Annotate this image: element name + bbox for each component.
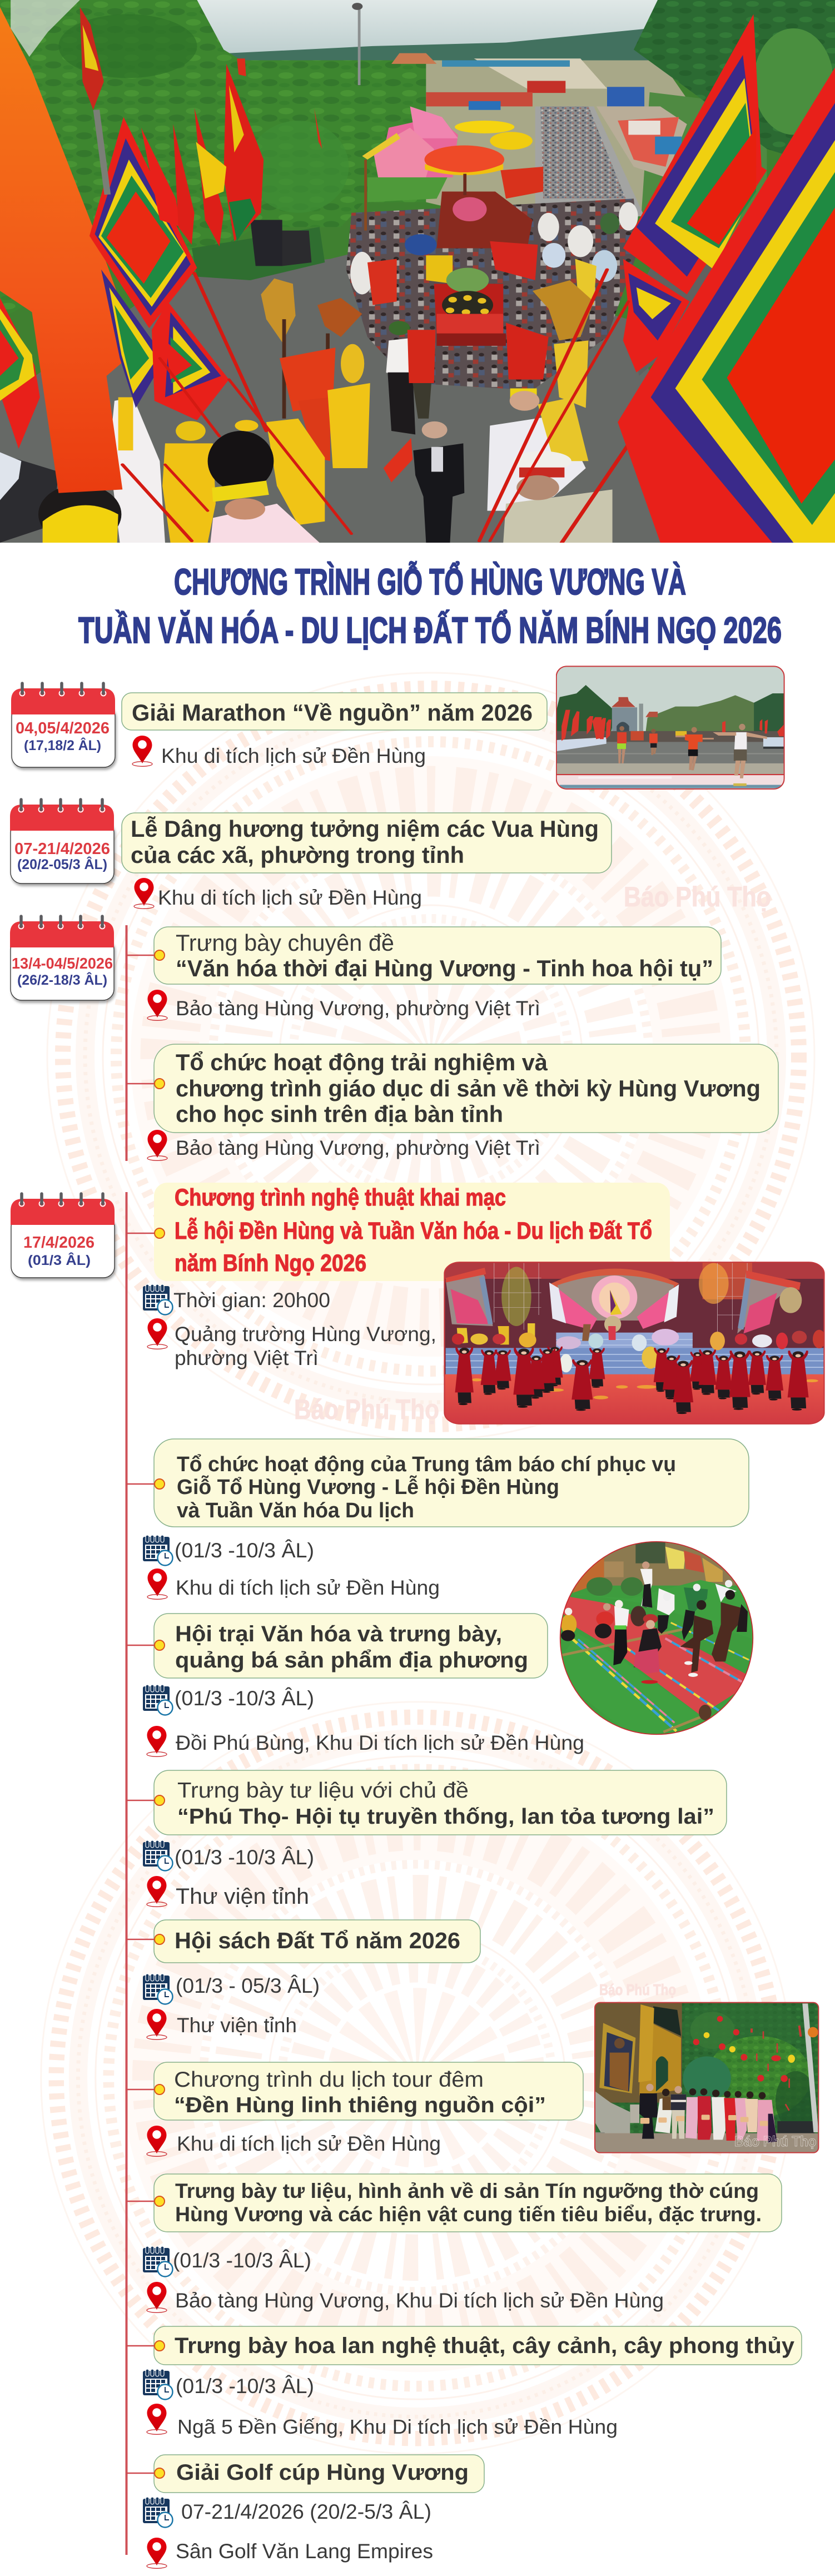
location: Ngã 5 Đền Giếng, Khu Di tích lịch sử Đền Hùng: [177, 2415, 618, 2438]
location: Bảo tàng Hùng Vương, phường Việt Trì: [176, 997, 540, 1020]
date: 07-21/4/2026 (20/2-5/3 ÂL): [181, 2500, 431, 2523]
date badge: 04,05/4/2026: [16, 719, 110, 737]
title pill: Lễ Dâng hương tưởng niệm các Vua Hùng: [131, 815, 599, 842]
date: (01/3 -10/3 ÂL): [175, 1846, 314, 1869]
watermark in photo: Báo Phú Thọ: [734, 2133, 816, 2150]
location: [147, 1726, 584, 1756]
item: orchid show: [126, 2326, 802, 2365]
timeline line: exhibition group: [126, 925, 128, 1161]
date: [143, 2497, 431, 2528]
location: [147, 990, 540, 1020]
date: (01/3 -10/3 ÂL): [175, 1539, 314, 1562]
location: Thư viện tỉnh: [177, 2014, 297, 2037]
photo: stage performance: [444, 1262, 825, 1425]
date: (01/3 -10/3 ÂL): [175, 1687, 314, 1710]
location: Bảo tàng Hùng Vương, Khu Di tích lịch sử Đền Hùng: [175, 2289, 664, 2312]
date badge: opening day: 17/4/2026: [23, 1234, 95, 1252]
location: [147, 2538, 433, 2568]
location: Khu di tích lịch sử Đền Hùng: [161, 744, 426, 767]
item: golf tournament: Giải Golf cúp Hùng Vương: [176, 2460, 469, 2485]
location: Khu di tích lịch sử Đền Hùng: [158, 886, 422, 909]
title pill: [122, 813, 612, 873]
item: opening art programme: Chương trình nghệ thuật khai mạc: [175, 1184, 506, 1211]
hero photo: Hung Kings festival procession: [0, 0, 835, 543]
date: [143, 2246, 311, 2276]
item: golf tournament: [126, 2455, 484, 2493]
watermark: Báo Phú Thọ: Báo Phú Thọ: [599, 1981, 676, 1998]
watermark: Báo Phú Thọ: Báo Phú Thọ: [624, 881, 771, 912]
location: [147, 1130, 540, 1160]
date badge: opening day: [11, 1194, 115, 1278]
date: [143, 1840, 314, 1870]
item: heritage education: chương trình giáo dục di sản về thời kỳ Hùng Vương: [176, 1075, 761, 1101]
item: opening art programme: [126, 1183, 670, 1281]
runner 1: [617, 726, 627, 763]
date badge: exhibition period: 13/4-04/5/2026: [12, 955, 113, 972]
item: heritage education: Tổ chức hoạt động trải nghiệm và: [176, 1049, 548, 1075]
watermark: Báo Phú Thọ: Báo Phú Thọ: [294, 1394, 439, 1425]
date: [143, 1685, 314, 1715]
item: document exhibition: “Phú Thọ- Hội tụ truyền thống, lan tỏa tương lai”: [177, 1805, 714, 1829]
location: [147, 1569, 440, 1599]
background: bronze drum watermark: [41, 673, 814, 2454]
date: [143, 2369, 314, 2400]
item: press centre: Giỗ Tổ Hùng Vương - Lễ hội Đền Hùng: [177, 1475, 559, 1499]
item: book fair: Hội sách Đất Tổ năm 2026: [175, 1928, 460, 1953]
location: Đồi Phú Bùng, Khu Di tích lịch sử Đền Hùng: [176, 1731, 584, 1754]
item: document exhibition: [126, 1770, 727, 1835]
location: Khu di tích lịch sử Đền Hùng: [176, 1576, 440, 1599]
location: phường Việt Trì: [175, 1347, 319, 1369]
item: thematic exhibition: Trưng bày chuyên đề: [176, 930, 394, 956]
location: [134, 878, 422, 909]
item: heritage education: cho học sinh trên địa bàn tỉnh: [176, 1101, 503, 1127]
title pill: của các xã, phường trong tỉnh: [131, 842, 464, 868]
item: book fair: [126, 1920, 480, 1963]
location: Thư viện tỉnh: [176, 1884, 309, 1909]
date: (01/3 -10/3 ÂL): [173, 2249, 311, 2272]
title pill: Giải Marathon “Về nguồn” năm 2026: [132, 699, 533, 726]
location: [147, 2404, 618, 2438]
date badge: (17,18/2 ÂL): [24, 737, 101, 753]
item: thematic exhibition: “Văn hóa thời đại Hùng Vương - Tinh hoa hội tụ”: [176, 955, 713, 981]
item: heritage documents: Hùng Vương và các hiện vật cung tiến tiêu biểu, đặc trưng.: [175, 2203, 762, 2226]
item: thematic exhibition: [126, 927, 721, 984]
date badge: exhibition period: (26/2-18/3 ÂL): [17, 971, 107, 988]
item: press centre: [126, 1439, 749, 1527]
location: Bảo tàng Hùng Vương, phường Việt Trì: [176, 1136, 540, 1159]
location: [147, 2282, 664, 2312]
date badge: [11, 683, 115, 767]
location: [147, 1876, 309, 1909]
runner 2: [649, 729, 658, 755]
title pill: [122, 693, 547, 730]
item: press centre: Tổ chức hoạt động của Trung tâm báo chí phục vụ: [177, 1453, 676, 1476]
item: document exhibition: Trưng bày tư liệu với chủ đề: [177, 1779, 469, 1803]
item: night tour: [126, 2062, 583, 2120]
date badge: (20/2-05/3 ÂL): [17, 856, 107, 872]
photo: night temple visitors: [594, 2002, 819, 2153]
date: [143, 1974, 320, 2004]
title: [78, 561, 782, 651]
item: heritage documents: [126, 2174, 782, 2232]
location: [147, 2126, 441, 2156]
item: opening art programme: năm Bính Ngọ 2026: [175, 1250, 366, 1277]
photo: marathon runners: [556, 666, 785, 790]
date: [143, 1535, 314, 1566]
time: [143, 1284, 330, 1314]
location: [147, 2009, 297, 2039]
item: culture camp: Hội trại Văn hóa và trưng bày,: [175, 1622, 502, 1646]
date: (01/3 -10/3 ÂL): [176, 2375, 314, 2398]
item: orchid show: Trưng bày hoa lan nghệ thuật, cây cảnh, cây phong thủy: [175, 2334, 795, 2358]
date badge: 07-21/4/2026: [14, 840, 110, 858]
timeline line: opening ceremony group: [126, 1192, 128, 2555]
runner 3: [675, 727, 714, 770]
date badge: exhibition period: [10, 916, 114, 1000]
item: press centre: và Tuần Văn hóa Du lịch: [177, 1499, 414, 1522]
location: Sân Golf Văn Lang Empires: [176, 2540, 433, 2563]
item: culture camp: [126, 1614, 548, 1678]
location: [147, 1318, 436, 1369]
item: night tour: “Đền Hùng linh thiêng nguồn cội”: [174, 2093, 546, 2117]
item: heritage documents: Trưng bày tư liệu, hình ảnh về di sản Tín ngưỡng thờ cúng: [175, 2180, 759, 2202]
location: Khu di tích lịch sử Đền Hùng: [177, 2132, 441, 2155]
runner 4: [713, 724, 767, 778]
item: night tour: Chương trình du lịch tour đêm: [174, 2068, 484, 2092]
location: [132, 736, 426, 767]
date badge: [10, 800, 114, 884]
item: heritage education: [126, 1044, 778, 1133]
location: Quảng trường Hùng Vương,: [175, 1323, 436, 1346]
date: (01/3 - 05/3 ÂL): [176, 1974, 320, 1997]
event: incense offering: [10, 800, 612, 909]
time: Thời gian: 20h00: [173, 1289, 330, 1312]
photo: bamboo dance circle: [559, 1541, 754, 1735]
item: culture camp: quảng bá sản phẩm địa phương: [175, 1648, 528, 1672]
event: marathon: [11, 683, 547, 767]
date badge: opening day: (01/3 ÂL): [28, 1252, 91, 1268]
item: opening art programme: Lễ hội Đền Hùng và Tuần Văn hóa - Du lịch Đất Tổ: [175, 1217, 652, 1244]
